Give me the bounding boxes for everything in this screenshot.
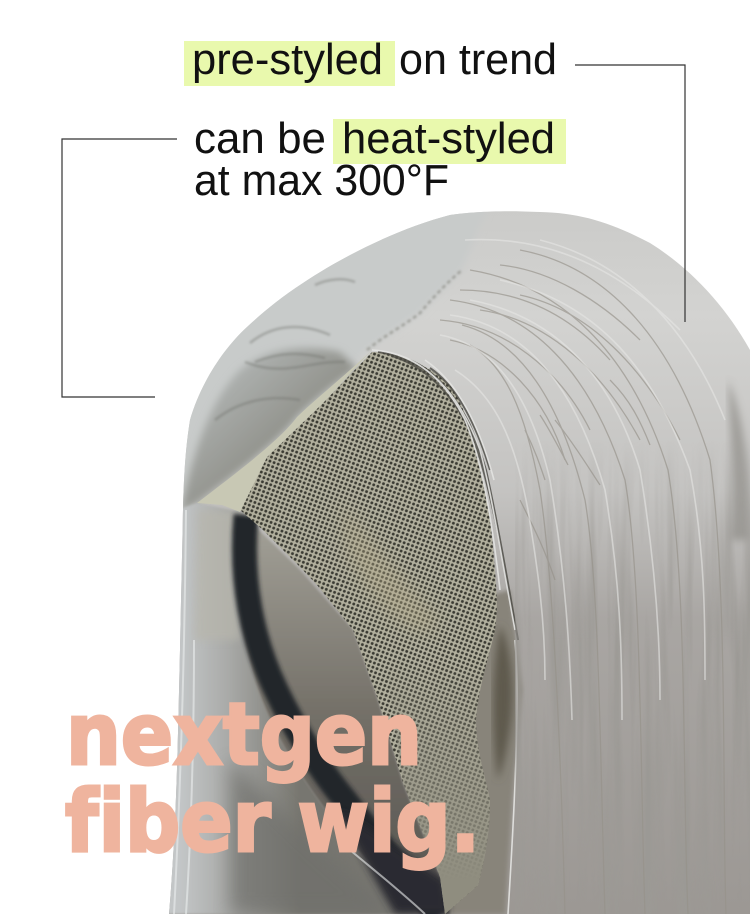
label: can be: can be: [194, 114, 326, 163]
leader line: top right: [575, 65, 685, 322]
lace lower fade: [389, 681, 490, 914]
label: on trend: on trend: [399, 35, 557, 84]
lace warm highlight: [340, 500, 440, 630]
right hair strands, dark: [440, 250, 726, 914]
leader line: left bracket: [62, 139, 177, 397]
label: at max 300°F: at max 300°F: [194, 156, 449, 205]
upper left hair warm tone: [197, 514, 238, 638]
title line: nextgen: nextgen: [66, 685, 422, 785]
left side wisps: [174, 510, 425, 914]
back hair above lace: [181, 348, 357, 512]
lace light edge: [197, 350, 372, 512]
lower left hair shading: [222, 762, 375, 914]
label: heat-styled: heat-styled: [342, 114, 555, 163]
hair silhouette: [169, 211, 750, 914]
dark hairline strands: [378, 352, 518, 640]
neck and cap interior: [237, 512, 450, 914]
hair shadow blob: [728, 380, 750, 540]
lace front: [240, 352, 497, 914]
light hairline strands: [372, 350, 517, 914]
label: pre-styled: pre-styled: [192, 35, 383, 84]
back hair streaks: [215, 279, 355, 420]
lower left hair panel: [165, 503, 420, 914]
callout: heat-styled: [62, 114, 566, 397]
tan strip shadow: [493, 625, 513, 780]
wig photo: [165, 190, 750, 914]
title line: fiber wig.: fiber wig.: [65, 772, 480, 872]
black elastic band: [244, 515, 440, 914]
vertical hair texture: [515, 475, 750, 796]
highlight: heat-styled: [333, 119, 566, 164]
title: [65, 685, 480, 872]
part line: [367, 270, 462, 350]
highlight: pre-styled: [184, 41, 395, 86]
tan inner strip behind lace: [440, 590, 522, 914]
dark lower band spread: [340, 810, 448, 914]
crown left of the part: [183, 212, 480, 500]
right hair strands, light: [440, 240, 725, 720]
callout: pre-styled on trend: [184, 35, 685, 322]
